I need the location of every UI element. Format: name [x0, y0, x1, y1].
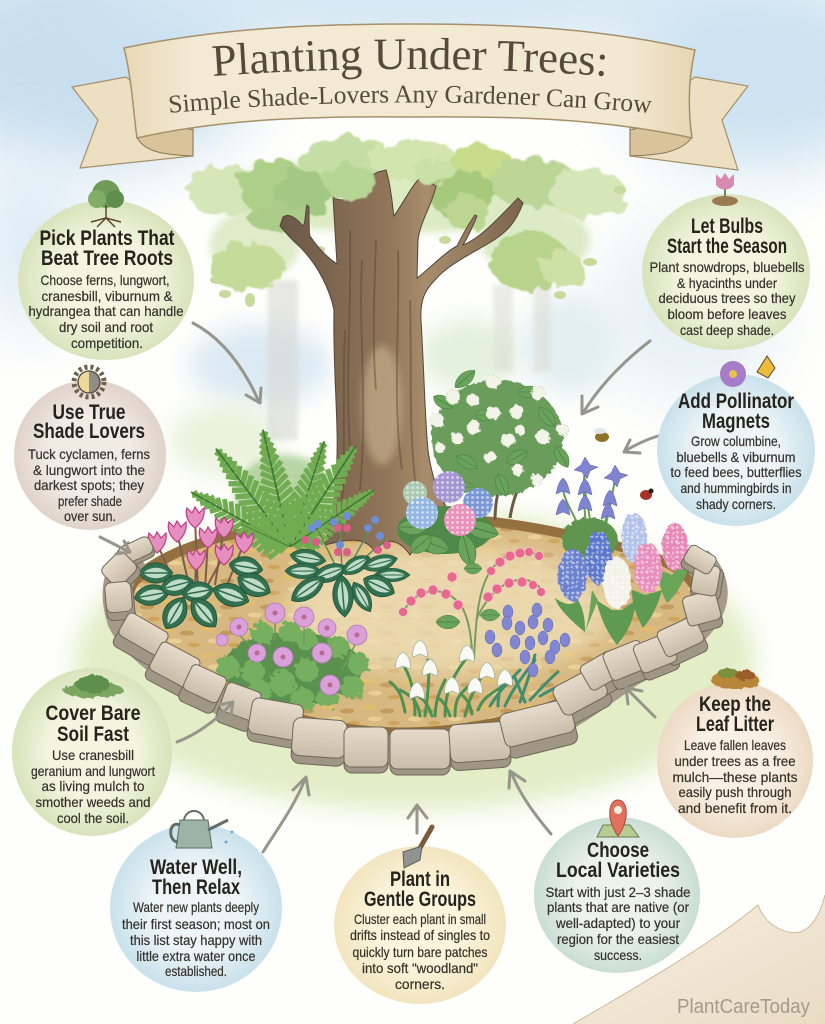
icon: fallen leaves — [711, 668, 759, 689]
panel: pollinators: and hummingbirds in — [680, 480, 792, 496]
title: Planting Under Trees: — [212, 38, 605, 80]
subtitle: Simple Shade-Lovers Any Gardener Can Grow — [170, 86, 652, 115]
snowdrops — [396, 640, 512, 699]
panel: leaf litter: Leaf Litter — [696, 713, 774, 736]
panel: shade lovers: prefer shade — [58, 493, 122, 509]
panel: water well: Water new plants deeply — [133, 899, 259, 915]
tree trunk — [280, 170, 523, 555]
bleeding heart — [398, 548, 546, 660]
lungwort — [285, 512, 410, 618]
panel: pick plants: hydrangea that can handle — [28, 303, 184, 319]
panel: pollinators: shady corners. — [696, 496, 776, 512]
icon: flower and butterfly — [720, 356, 775, 387]
panel: shade lovers: Use True — [52, 401, 126, 424]
panel: leaf litter: Keep the — [699, 693, 771, 716]
viburnum shrub — [430, 366, 573, 520]
page curl — [573, 895, 825, 1024]
cyclamen — [133, 507, 275, 634]
panel: water well: their first season; most on — [122, 916, 270, 932]
brand: PlantCareToday — [677, 996, 810, 1018]
panel: shade lovers: Tuck cyclamen, ferns — [28, 446, 150, 462]
panel: local varieties — [534, 800, 700, 973]
panel: cover bare soil: Soil Fast — [57, 723, 129, 746]
icon: ground cover — [63, 675, 123, 698]
distant pale trees — [267, 280, 551, 440]
panel: water well: Water Well, — [150, 856, 242, 879]
panel: gentle groups: corners. — [395, 976, 445, 992]
panel: pick plants: Pick Plants That — [40, 227, 175, 250]
stone border — [99, 535, 725, 775]
panel: bulbs: & hyacinths under — [677, 275, 777, 291]
panel: cover bare soil — [12, 668, 172, 836]
panel: pick plants: dry soil and root — [59, 319, 153, 335]
panel: bulbs: bloom before leaves — [668, 306, 786, 322]
panel: pollinators: bluebells & viburnum — [676, 449, 796, 465]
panel: leaf litter: mulch—these plants — [672, 769, 798, 785]
cranesbill geranium — [216, 603, 369, 712]
arrows — [100, 323, 658, 852]
panel: pick plants: Beat Tree Roots — [41, 247, 173, 270]
panel: pick plants — [18, 180, 194, 360]
panel: pollinators — [657, 356, 815, 526]
panel: pick plants: competition. — [71, 335, 143, 351]
panel: local varieties: well-adapted) to your — [555, 915, 680, 931]
panel: water well: established. — [165, 963, 227, 979]
panel: shade lovers: darkest spots; they — [34, 477, 144, 493]
panel: local varieties: Start with just 2–3 shade — [546, 884, 691, 900]
panel: leaf litter: under trees as a free — [674, 753, 796, 769]
icon: tulip bulb — [712, 173, 738, 206]
panel: pick plants: Choose ferns, lungwort, — [40, 272, 170, 288]
panel: water well: Then Relax — [152, 876, 240, 899]
garden bed mulch — [119, 513, 708, 741]
panel: gentle groups — [334, 827, 506, 1004]
icon: watering can — [171, 811, 234, 848]
panel: shade lovers: Shade Lovers — [33, 420, 145, 443]
panel: water well: little extra water once — [136, 948, 256, 964]
panel: water well — [110, 811, 282, 992]
bluebells and snowdrops foliage — [390, 655, 572, 716]
banner tails — [72, 77, 748, 170]
panel: bulbs: deciduous trees so they — [658, 290, 796, 306]
panel: cover bare soil: Cover Bare — [46, 702, 140, 725]
panel: local varieties: Local Varieties — [556, 859, 680, 882]
icon: half sun — [74, 367, 104, 397]
panel: cover bare soil: geranium and lungwort — [31, 763, 155, 779]
icon: trowel — [403, 827, 432, 868]
panel: bulbs: Plant snowdrops, bluebells — [650, 259, 804, 275]
bee and ladybug — [594, 428, 654, 500]
panel: leaf litter: Leave fallen leaves — [684, 737, 786, 753]
panel: shade lovers — [14, 367, 166, 530]
panel: pollinators: Grow columbine, — [691, 433, 781, 449]
panel: gentle groups: Cluster each plant in small — [354, 911, 486, 927]
panel: gentle groups: Plant in — [390, 868, 450, 891]
panel: pollinators: Add Pollinator — [678, 390, 794, 413]
panel: shade lovers: & lungwort into the — [33, 462, 145, 478]
banner — [71, 23, 749, 171]
panel: gentle groups: quickly turn bare patches — [352, 944, 488, 960]
panel: local varieties: success. — [594, 947, 642, 963]
panel: bulbs: Let Bulbs — [691, 215, 763, 238]
panel: shade lovers: over sun. — [64, 508, 116, 524]
icon: tree with roots — [88, 180, 124, 227]
bellflowers — [556, 457, 628, 562]
panel: cover bare soil: Use cranesbill — [52, 747, 134, 763]
panel: local varieties: plants that are native (or — [547, 899, 689, 915]
panel: cover bare soil: smother weeds and — [36, 794, 150, 810]
icon: map pin — [597, 800, 639, 837]
panel: cover bare soil: as living mulch to — [42, 778, 145, 794]
panel: gentle groups: drifts instead of singles to — [350, 927, 490, 943]
hydrangea — [397, 471, 501, 569]
panel: local varieties: Choose — [587, 839, 649, 862]
panel: bulbs: cast deep shade. — [680, 322, 774, 338]
front foliage over trunk — [324, 158, 455, 200]
panel: water well: this list stay happy with — [130, 932, 262, 948]
panel: leaf litter: easily push through — [678, 784, 792, 800]
panel: cover bare soil: cool the soil. — [57, 810, 129, 826]
panel: leaf litter: and benefit from it. — [678, 800, 792, 816]
panel: bulbs — [642, 173, 810, 350]
panel: pick plants: cranesbill, viburnum & — [42, 288, 173, 304]
panel: pollinators: to feed bees, butterflies — [670, 464, 802, 480]
hyacinths — [555, 513, 692, 645]
panel: gentle groups: Gentle Groups — [364, 888, 476, 911]
bluebells — [485, 603, 570, 677]
panel: pollinators: Magnets — [702, 410, 770, 433]
panel: leaf litter — [657, 668, 813, 838]
panel: gentle groups: into soft "woodland" — [362, 960, 478, 976]
panel: local varieties: region for the easiest — [557, 931, 679, 947]
fern — [181, 425, 384, 564]
tree foliage — [187, 137, 626, 307]
